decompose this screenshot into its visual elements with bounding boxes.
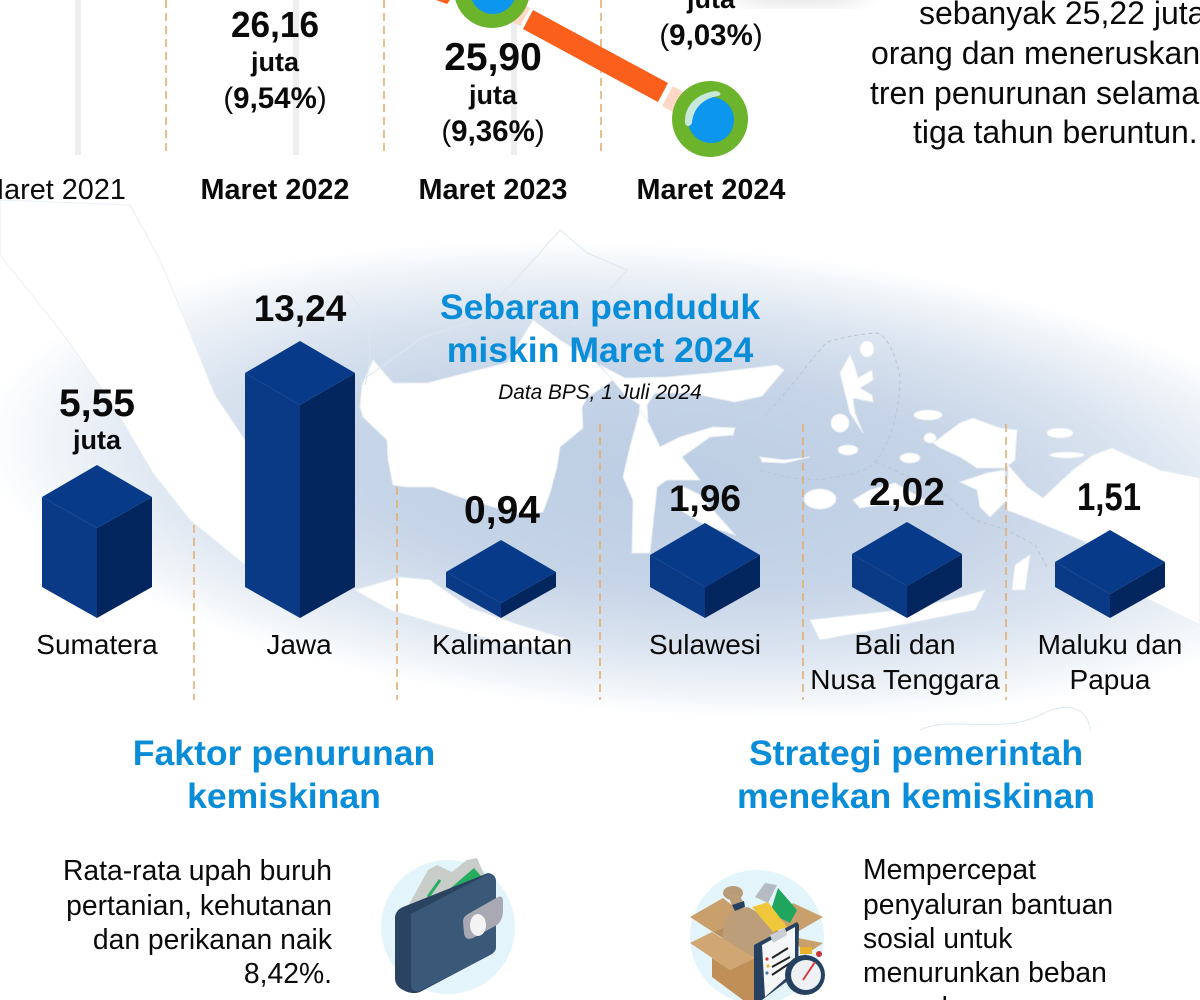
value Maret 2023: 25,90 [444, 36, 542, 79]
text block: strategi [863, 853, 1113, 1000]
value Maret 2024 [659, 0, 763, 52]
trend chart: poverty 2021-2024 [0, 0, 785, 206]
heading: sebaran penduduk miskin [440, 287, 760, 370]
bar: Jawa [245, 288, 355, 660]
text block: strategi: Mempercepat [863, 853, 1036, 885]
marker Maret 2024 [672, 81, 748, 157]
year labels: Maret 2023 [419, 174, 567, 206]
value Maret 2024: (9,03%) [659, 19, 763, 52]
bar: Maluku dan Papua [1038, 476, 1182, 695]
bar: Jawa: Jawa [266, 629, 332, 660]
heading: faktor penurunan kemiskinan [133, 733, 435, 816]
text block: trend summary: tren penurunan selama [870, 75, 1199, 111]
value Maret 2022: (9,54%) [223, 82, 327, 115]
year labels: Maret 2024 [637, 174, 785, 206]
bar: Bali dan Nusa Tenggara: Bali dan [854, 629, 956, 660]
dashed year separators [166, 0, 601, 155]
text block: trend summary: orang dan meneruskan [871, 35, 1200, 71]
heading: faktor penurunan kemiskinan: kemiskinan [187, 776, 381, 816]
source note: Data BPS, 1 Juli 2024 [498, 381, 702, 404]
bar: Bali dan Nusa Tenggara [810, 471, 1000, 695]
text block: trend summary: tiga tahun beruntun. [913, 114, 1198, 150]
bar chart: poor population by region [36, 288, 1182, 695]
value Maret 2022: juta [250, 47, 300, 77]
bar: Kalimantan [432, 489, 572, 660]
text block: faktor: 8,42%. [244, 957, 332, 989]
pale year stems [75, 0, 517, 155]
text block: strategi: menurunkan beban [863, 956, 1107, 988]
heading: faktor penurunan kemiskinan: Faktor penurunan [133, 733, 435, 773]
text block: trend summary [870, 0, 1200, 150]
dashed region separators [194, 424, 1006, 700]
bar: Sumatera [36, 382, 158, 660]
bar: Sumatera: juta [72, 425, 122, 455]
text block: faktor: pertanian, kehutanan [66, 889, 332, 921]
text block: strategi: sosial untuk [863, 922, 1013, 954]
bar: Sulawesi: Sulawesi [649, 629, 761, 660]
map of Indonesia background [0, 197, 1200, 763]
heading: strategi pemerintah [737, 733, 1095, 816]
text block: faktor: Rata-rata upah buruh [63, 854, 332, 886]
icon: wallet [381, 858, 515, 994]
text block: faktor [63, 854, 333, 989]
year labels [0, 174, 785, 206]
text block: strategi: penyaluran bantuan [863, 888, 1113, 920]
year labels: Maret 2022 [201, 174, 349, 206]
bar: Sulawesi: 1,96 [669, 478, 741, 519]
bar: Maluku dan Papua: 1,51 [1077, 476, 1141, 519]
bar: Sumatera: Sumatera [36, 629, 158, 660]
bar: Maluku dan Papua: Maluku dan [1038, 629, 1182, 660]
value Maret 2023: (9,36%) [441, 115, 545, 148]
bar: Jawa: 13,24 [254, 288, 347, 329]
bar: Bali dan Nusa Tenggara: Nusa Tenggara [810, 664, 1000, 695]
value Maret 2022: 26,16 [231, 4, 319, 45]
heading: strategi pemerintah: menekan kemiskinan [737, 776, 1095, 816]
bar: Sumatera: 5,55 [59, 382, 135, 425]
bar: Maluku dan Papua: Papua [1070, 664, 1151, 695]
soft grey haze at top [730, 0, 870, 6]
value Maret 2023 [441, 36, 545, 148]
heading: strategi pemerintah: Strategi pemerintah [749, 733, 1083, 773]
text block: faktor: dan perikanan naik [93, 923, 333, 955]
bar: Kalimantan: 0,94 [464, 489, 540, 532]
bar: Kalimantan: Kalimantan [432, 629, 572, 660]
icon: aid box with clipboard and stopwatch [690, 870, 825, 1000]
bar: Sulawesi [649, 478, 761, 660]
orange trend line [436, 0, 690, 116]
heading: sebaran penduduk miskin: Sebaran penduduk [440, 287, 760, 327]
value Maret 2022 [223, 4, 327, 115]
heading: sebaran penduduk miskin: miskin Maret 2024 [447, 330, 753, 370]
bar: Bali dan Nusa Tenggara: 2,02 [869, 471, 945, 514]
marker Maret 2023 [454, 0, 530, 28]
value Maret 2023: juta [468, 80, 518, 110]
